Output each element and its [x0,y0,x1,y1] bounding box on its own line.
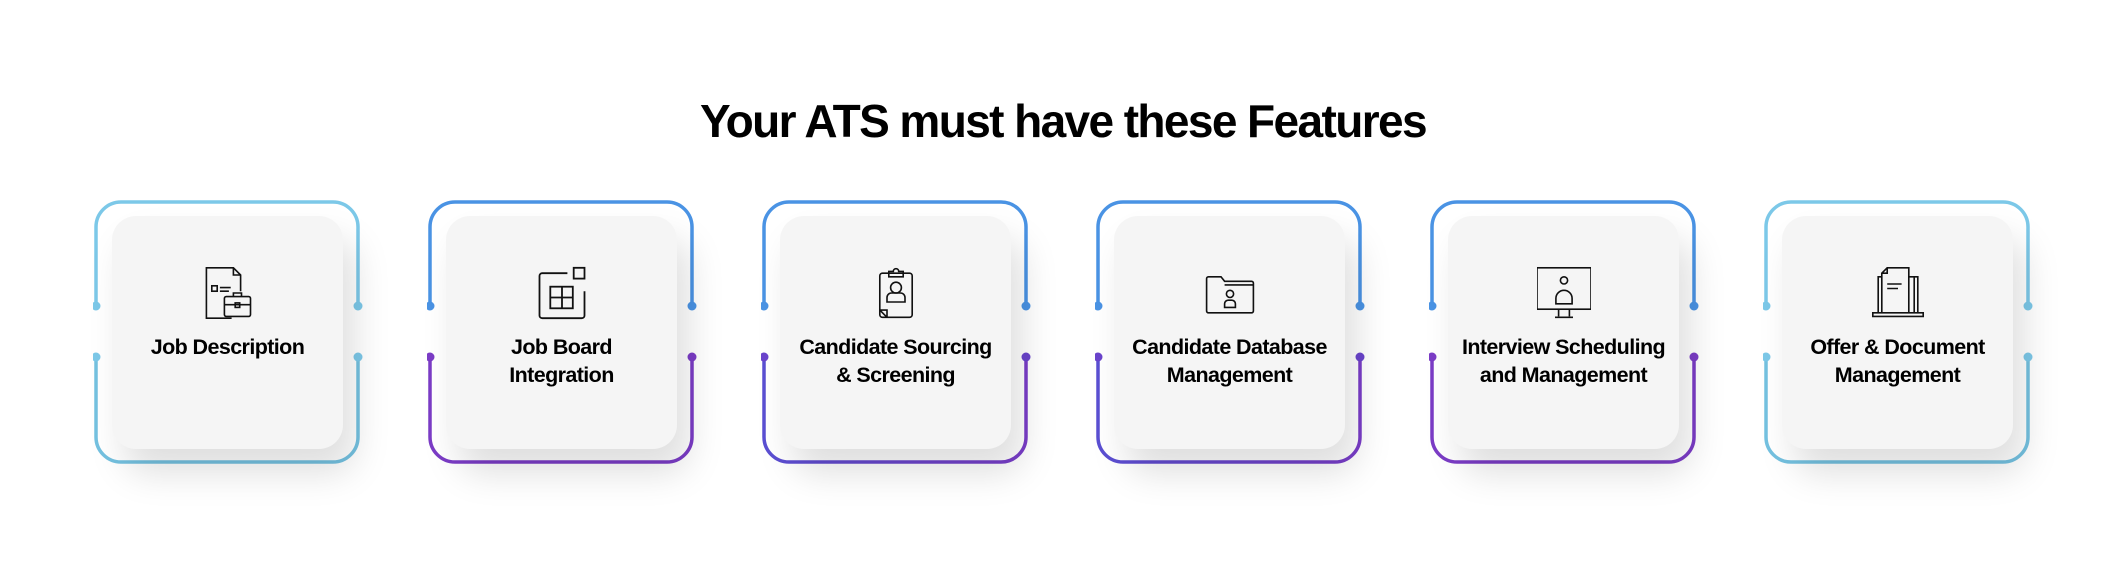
label: Candidate Sourcing [799,335,992,359]
panel: offer & document [1763,200,2036,484]
label: Job Description [151,335,304,359]
panel: candidate database [1095,200,1368,484]
label: & Screening [836,363,955,387]
label: Management [1835,363,1960,387]
label [1810,335,1986,387]
label [1132,335,1327,387]
label: Interview Scheduling [1462,335,1665,359]
panel: job board integration [427,200,700,484]
label [1462,335,1665,387]
icon: laptop with document [1872,267,1924,318]
label: Candidate Database [1132,335,1327,359]
panel: candidate sourcing [761,200,1034,484]
label: Management [1167,363,1292,387]
label: Offer & Document [1810,335,1985,359]
label: Integration [509,363,614,387]
icon: board grid [538,266,586,320]
label [799,335,992,387]
title: Your ATS must have these Features [700,95,1426,147]
label: Job Board [511,335,612,359]
panel: interview scheduling [1429,200,1702,484]
icon: folder with person [1206,276,1254,314]
label: and Management [1480,363,1647,387]
panel: job description [93,200,366,484]
icon: monitor with person [1537,267,1591,318]
label [509,335,614,387]
icon: clipboard with person [879,268,913,318]
icon: document with briefcase [206,267,252,319]
